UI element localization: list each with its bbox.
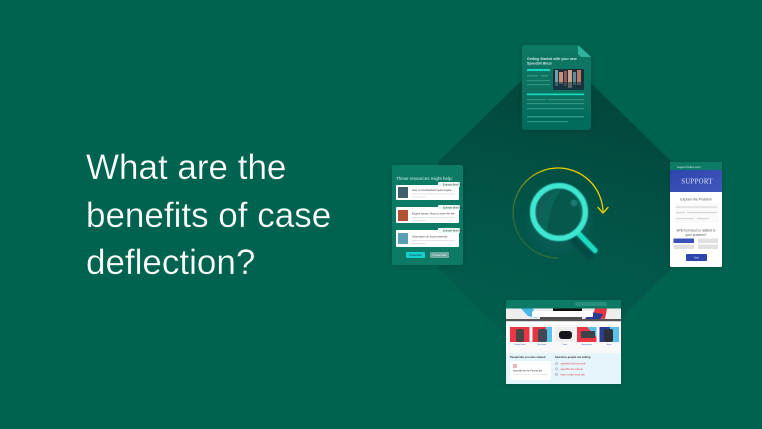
illustration	[392, 45, 722, 386]
result card 1	[396, 182, 463, 200]
photo	[553, 69, 584, 90]
help section	[506, 353, 621, 384]
title: deflection?	[86, 243, 255, 282]
support banner: SUPPORT	[681, 178, 713, 186]
panel heading: These resources might help:	[396, 176, 453, 181]
result card 1: How to troubleshoot heart engine	[412, 188, 452, 192]
circular arrow	[513, 168, 608, 258]
magnifier with arrow	[513, 168, 608, 258]
title: benefits of case	[86, 196, 331, 234]
help section: Searches people are asking	[555, 355, 591, 359]
help section: how to make heart rate	[560, 374, 586, 376]
product tiles	[508, 325, 620, 353]
lens	[536, 188, 582, 234]
help section: speedbit look-how-code	[560, 362, 586, 366]
ring	[533, 186, 585, 238]
product labels	[514, 343, 612, 346]
buttons	[406, 252, 449, 258]
product labels: Replacement	[582, 343, 593, 346]
next button: Next	[694, 256, 699, 260]
hero banner	[506, 308, 621, 322]
result card 2: Engine issues: How to solve the die	[412, 212, 455, 216]
panel: storefront	[506, 300, 621, 384]
result card 3: Information on local university	[412, 234, 448, 238]
result card 2: Example Best Doc	[443, 206, 463, 210]
form text: Explain the Problem	[680, 198, 712, 202]
panel: document: Speedbit Blaze	[527, 62, 552, 66]
title	[86, 148, 331, 282]
panel: support form: Which product is related to	[676, 228, 716, 232]
panel: resources	[392, 165, 463, 265]
document heading: Getting Started with your new	[527, 57, 577, 61]
product labels: Charge Series	[514, 344, 526, 346]
product labels: Sense	[606, 344, 612, 346]
help section: speedbit use manual	[560, 368, 583, 371]
product labels: Versa	[562, 344, 567, 346]
result card 3: Example Best Doc	[443, 230, 463, 232]
octagon background	[438, 48, 672, 384]
lens glow	[524, 185, 596, 257]
result card 2	[396, 205, 463, 223]
handle shadow	[572, 238, 590, 256]
panel: support form: support.blaze.com	[677, 165, 701, 169]
result card 3	[396, 228, 463, 247]
product labels: Ace Series	[538, 343, 546, 346]
help section: People like you also viewed	[510, 355, 546, 359]
buttons: Know How	[410, 254, 422, 257]
panel: document	[522, 45, 591, 130]
buttons: Create Case	[432, 254, 447, 257]
handle	[579, 234, 595, 250]
panel: support form: your problem?	[685, 233, 707, 237]
help section: Speedbit for the Fitness girl	[513, 370, 543, 372]
result card 1: Example Best Doc	[443, 184, 463, 186]
title: What are the	[86, 148, 286, 187]
panel: support form	[670, 162, 722, 267]
